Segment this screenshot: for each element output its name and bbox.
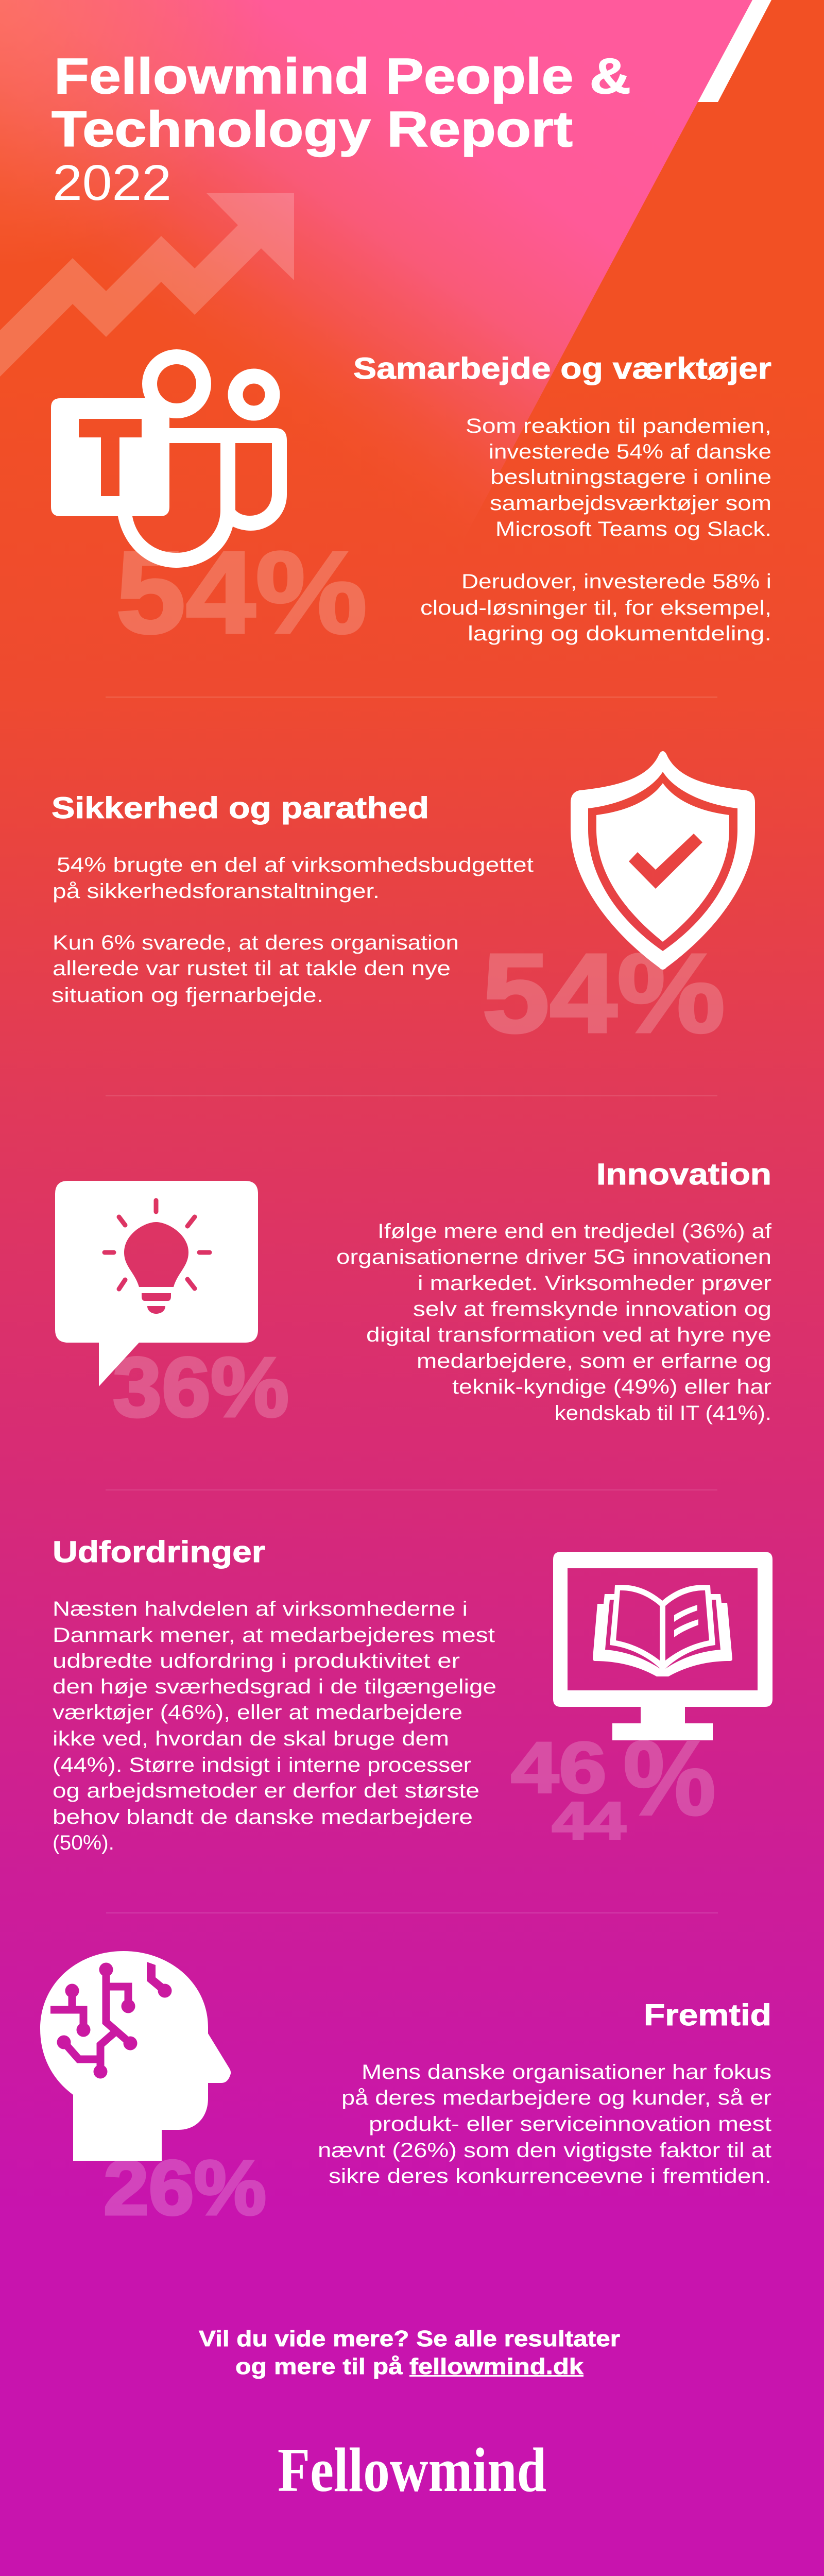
body text [420,415,771,645]
body text: produkt- eller serviceinnovation mest [369,2113,771,2136]
body text: investerede 54% af danske [489,440,771,463]
heading: Sikkerhed og parathed [52,791,429,825]
body text: på sikkerhedsforanstaltninger. [53,880,380,903]
body text: allerede var rustet til at takle den nye [53,957,451,980]
body text: teknik-kyndige (49%) eller har [452,1376,771,1398]
body text: ikke ved, hvordan de skal bruge dem [53,1727,449,1750]
body text: Danmark mener, at medarbejderes mest [53,1624,495,1647]
icon: rising arrow [0,193,294,377]
ghost number 54%: 54% [482,931,725,1056]
body text: Næsten halvdelen af virksomhederne i [53,1598,468,1620]
body text: og arbejdsmetoder er derfor det største [53,1780,479,1802]
heading: Fremtid [644,1998,771,2032]
body text: udbredte udfordring i produktivitet er [53,1650,460,1672]
ghost numbers 46 44 %: 46 [511,1727,607,1808]
body text: samarbejdsværktøjer som [490,492,771,515]
panel: samarbejde og vaerktoejer [51,349,771,657]
title: 2022 [53,155,171,211]
body text [53,1598,496,1854]
title: Fellowmind People & [54,48,631,104]
panel: udfordringer [53,1535,772,1854]
call to action: og mere til på [235,2354,403,2379]
body text: værktøjer (46%), eller at medarbejdere [53,1701,462,1724]
body text: Kun 6% svarede, at deres organisation [53,931,459,954]
panel: innovation [55,1158,772,1434]
body text: digital transformation ved at hyre nye [366,1324,771,1346]
body text: lagring og dokumentdeling. [468,622,771,645]
body text: på deres medarbejdere og kunder, så er [341,2087,771,2109]
body text: den høje sværhedsgrad i de tilgængelige [53,1675,496,1698]
body text: kendskab til IT (41%). [555,1402,771,1425]
body text: Microsoft Teams og Slack. [495,518,771,540]
body text: (50%). [53,1832,114,1854]
ghost numbers 46 44 %: 44 [552,1791,626,1850]
icon: Microsoft Teams [51,349,287,568]
heading: Udfordringer [53,1535,265,1569]
body text: (44%). Større indsigt i interne processer [53,1754,471,1776]
body text: Som reaktion til pandemien, [466,415,771,437]
title [52,48,631,211]
ghost number 36%: 36% [113,1340,289,1434]
heading: Innovation [596,1158,771,1191]
ghost numbers 46 44 % [511,1719,716,1850]
call to action: fellowmind.dk [409,2354,584,2379]
body text: selv at fremskynde innovation og [413,1298,771,1320]
body text: medarbejdere, som er erfarne og [417,1350,771,1372]
icon: speech bubble with light bulb [55,1181,258,1386]
logo: Fellowmind: Fellowmind [278,2435,546,2505]
body text: Mens danske organisationer har fokus [362,2061,771,2083]
pink diagonal panel [0,0,752,567]
body text [52,854,534,1007]
icon: shield with check [571,751,755,970]
call to action: Vil du vide mere? Se alle resultater [199,2326,620,2351]
body text: organisationerne driver 5G innovationen [336,1246,771,1268]
panel: sikkerhed og parathed [52,751,755,1056]
ghost number 54%: 54% [116,527,367,657]
ghost number 26%: 26% [104,2144,266,2231]
body text: i markedet. Virksomheder prøver [418,1272,771,1295]
heading: Samarbejde og værktøjer [353,352,771,385]
body text: 54% brugte en del af virksomhedsbudgettet [57,854,534,876]
body text [318,2061,771,2188]
body text [336,1220,772,1425]
body text: cloud-løsninger til, for eksempel, [420,597,771,619]
body text: behov blandt de danske medarbejdere [53,1806,473,1828]
body text: beslutningstagere i online [490,466,771,488]
white diagonal stripe [698,0,771,102]
body text: situation og fjernarbejde. [52,984,323,1007]
ghost numbers 46 44 %: % [623,1719,716,1837]
body text: Ifølge mere end en tredjedel (36%) af [377,1220,772,1243]
panel: fremtid [40,1951,771,2231]
body text: nævnt (26%) som den vigtigste faktor til at [318,2139,771,2162]
icon: monitor with open book [553,1552,772,1740]
body text: Derudover, investerede 58% i [461,570,771,593]
icon: head with circuit brain [40,1951,231,2161]
title: Technology Report [52,101,573,157]
call to action [199,2326,620,2379]
body text: sikre deres konkurrenceevne i fremtiden. [329,2165,771,2188]
